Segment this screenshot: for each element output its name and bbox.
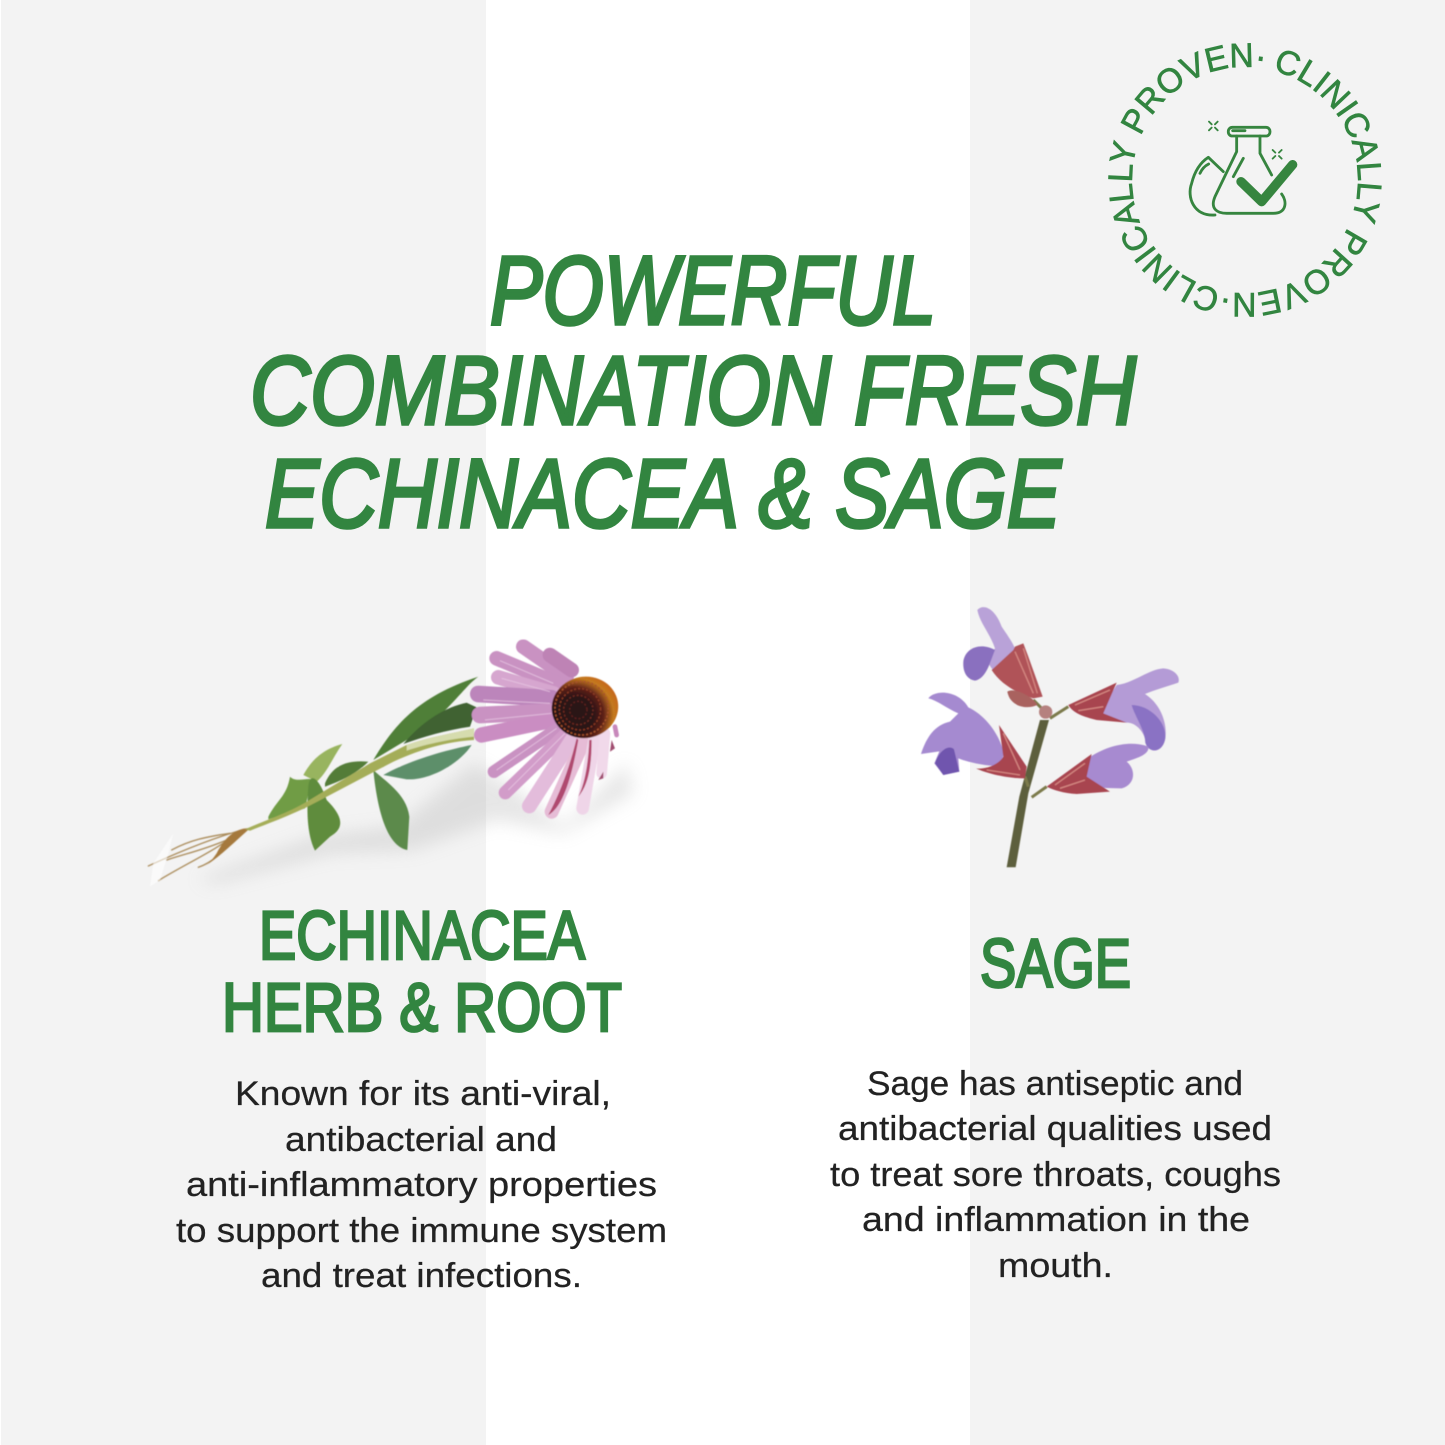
text: sage description: [830, 1065, 1281, 1285]
text: echinacea description: Known for its anti-viral,: [235, 1075, 611, 1113]
title: COMBINATION FRESH: [250, 336, 1137, 445]
stem: [245, 728, 474, 831]
icon: flask, drop and check mark: [1190, 122, 1293, 215]
text: sage description: and inflammation in the: [862, 1201, 1250, 1239]
heading: echinacea herb and root: ECHINACEA: [259, 897, 585, 974]
heading: echinacea herb and root: [222, 897, 622, 1046]
seed cone: [547, 671, 623, 743]
text: echinacea description: [176, 1075, 667, 1295]
plant shadow: [197, 763, 633, 883]
text: sage description: Sage has antiseptic and: [867, 1065, 1243, 1103]
stem node: [1039, 705, 1052, 719]
text: sage description: mouth.: [998, 1247, 1113, 1285]
title: [250, 236, 1137, 548]
text: sage description: antibacterial qualities used: [838, 1110, 1272, 1148]
text: sage description: to treat sore throats, coughs: [830, 1156, 1281, 1194]
badge: clinically proven: [1108, 43, 1382, 317]
heading: echinacea herb and root: HERB & ROOT: [222, 969, 622, 1046]
text: echinacea description: to support the immune system: [176, 1212, 667, 1250]
lower right flower: [1047, 744, 1148, 794]
text: echinacea description: and treat infections.: [261, 1257, 582, 1295]
heading: sage: SAGE: [980, 925, 1131, 1002]
roots: [148, 829, 245, 881]
text: echinacea description: anti-inflammatory properties: [186, 1166, 657, 1204]
title: ECHINACEA & SAGE: [265, 439, 1062, 548]
petal streaks: [483, 661, 565, 790]
top flower: [963, 607, 1043, 707]
panel: sage: [830, 607, 1281, 1285]
title: POWERFUL: [490, 236, 936, 345]
illustration: sage flower stem: [921, 607, 1179, 867]
illustration: echinacea flower with stem and root: [148, 647, 633, 887]
badge circular text: CLINICALLY PROVEN·CLINICALLY PROVEN·: [1108, 43, 1382, 317]
leaves: [373, 677, 478, 760]
left flower: [921, 693, 1027, 778]
petals: [478, 647, 617, 812]
right upper flower: [1068, 668, 1179, 751]
panel: echinacea: [148, 647, 667, 1295]
text: echinacea description: antibacterial and: [285, 1121, 557, 1159]
stem: [1007, 720, 1049, 867]
